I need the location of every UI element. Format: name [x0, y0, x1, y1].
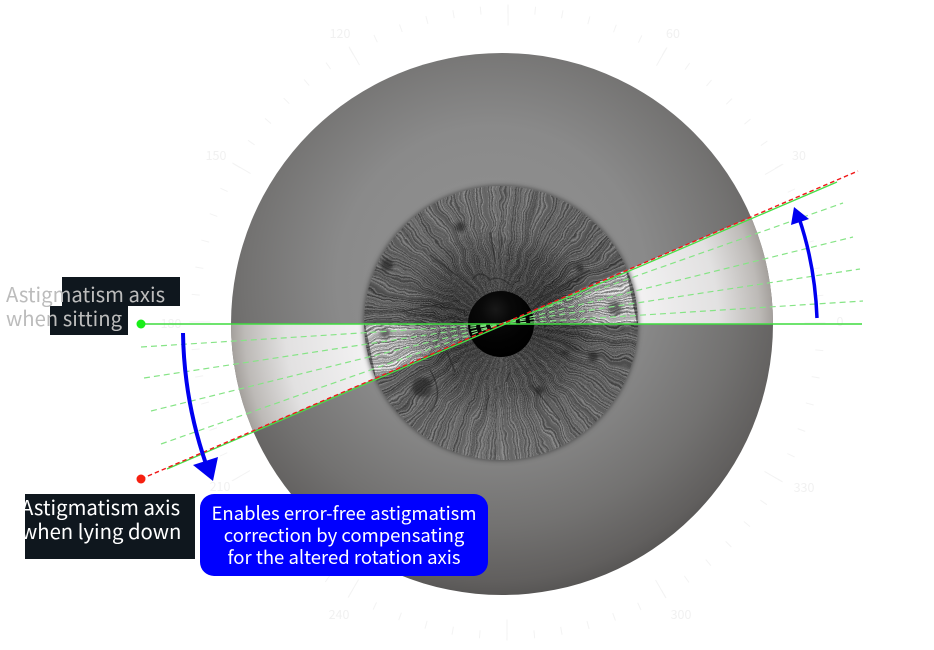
- label: astigmatism axis when lying down: [21, 491, 195, 559]
- intermediate green dashed axes: [141, 203, 863, 444]
- callout: blue explanation box: Enables error-free astigmatism: [212, 500, 476, 526]
- sclera: [231, 53, 773, 595]
- brightened iris wedge: [365, 270, 637, 378]
- label: astigmatism axis when lying down: Astigmatism axis: [21, 491, 180, 521]
- protractor scale labels: 0: [837, 311, 844, 330]
- protractor scale labels: 60: [666, 23, 680, 42]
- iris dark spots: [380, 222, 622, 397]
- label: astigmatism axis when lying down: when lying down: [21, 515, 181, 545]
- protractor scale ticks: [194, 10, 820, 636]
- eyeball base with protractor scale: [162, 4, 843, 640]
- protractor scale labels: 240: [329, 604, 349, 623]
- label: astigmatism axis when sitting: Astigmatism axis: [6, 278, 165, 308]
- label: astigmatism axis when sitting: [6, 277, 180, 335]
- protractor scale labels: 30: [792, 145, 806, 164]
- pupil: [468, 291, 534, 357]
- callout: blue explanation box: for the altered rotation axis: [228, 544, 460, 570]
- arrow: upward rotation right: [791, 207, 817, 318]
- protractor scale labels: 330: [794, 477, 814, 496]
- protractor scale labels: 120: [330, 23, 350, 42]
- protractor scale labels: [161, 23, 844, 623]
- callout: blue explanation box: correction by compensating: [224, 522, 464, 548]
- highlighted correction wedge on sclera: [231, 218, 773, 430]
- label: astigmatism axis when sitting: when sitting: [6, 302, 122, 332]
- arrow: downward rotation left: [183, 333, 218, 481]
- callout: blue explanation box: [200, 494, 488, 576]
- protractor scale labels: 150: [206, 145, 226, 164]
- iris crypt furrows: [400, 232, 590, 420]
- lying axis: red dashed line and dot: [136, 171, 858, 484]
- protractor scale labels: 180: [161, 313, 181, 332]
- iris: [364, 186, 638, 460]
- protractor scale labels: 210: [210, 476, 230, 495]
- sitting axis: green line and dot: [136, 320, 862, 328]
- protractor scale labels: 300: [671, 604, 691, 623]
